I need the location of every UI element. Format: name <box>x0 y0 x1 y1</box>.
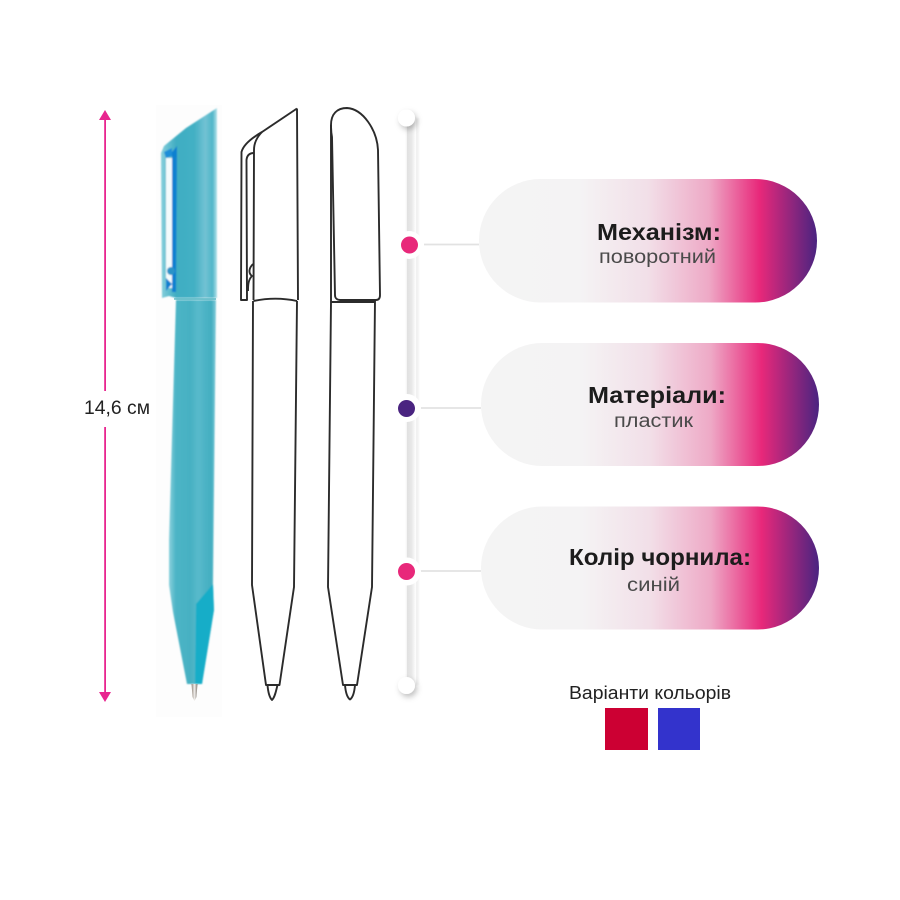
colour swatch: blue <box>658 708 700 750</box>
height label: 14,6 см <box>84 398 150 419</box>
photo of teal pen <box>156 105 222 717</box>
mechanism heading: Механізм: <box>597 219 721 245</box>
materials heading: Матеріали: <box>588 382 726 408</box>
ink colour heading: Колір чорнила: <box>569 544 751 570</box>
timeline top end cap <box>398 110 415 126</box>
panel: mechanism <box>479 179 817 302</box>
connector and marker: mechanism <box>395 231 479 259</box>
mechanism value: поворотний <box>599 247 716 268</box>
materials value: пластик <box>614 411 694 432</box>
colour swatch: red <box>605 708 648 750</box>
side outline drawing of pen <box>241 108 298 700</box>
connector and marker: materials <box>393 394 481 422</box>
panel: ink colour <box>481 506 819 630</box>
front outline drawing of pen <box>328 108 380 700</box>
height dimension arrow <box>99 110 111 702</box>
timeline rail <box>406 118 419 685</box>
connector and marker: ink colour <box>393 558 481 586</box>
timeline bottom end cap <box>398 677 415 694</box>
ink colour value: синій <box>627 575 680 596</box>
panel: materials <box>481 343 819 466</box>
colour options heading: Варіанти кольорів <box>569 683 731 703</box>
